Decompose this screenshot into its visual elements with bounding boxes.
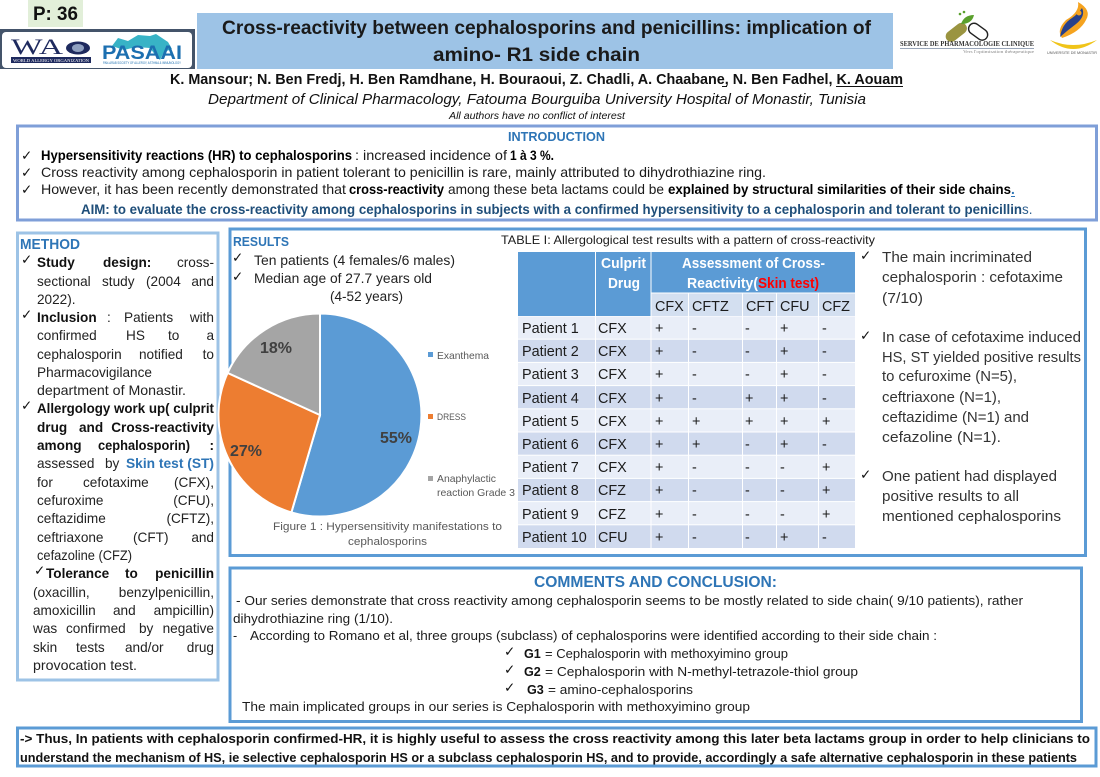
allergology work up: by: [105, 456, 120, 471]
study design: cross-: [177, 255, 214, 270]
table rows: Patient 1: [522, 321, 579, 337]
key findings list: positive results to all: [882, 489, 1019, 505]
logos: WAO and PASAAI: PASAAI: [102, 43, 182, 64]
inclusion: :: [107, 310, 111, 325]
conflict of interest note: All authors have no conflict of interest: [448, 111, 626, 122]
logo: university of Monastir: [1047, 2, 1097, 55]
logo: service de pharmacologie clinique: Vers l'optimisation thérapeutique: [963, 49, 1034, 54]
authors: K. Mansour; N. Ben Fredj, H. Ben Ramdhane, H. Bouraoui, Z. Chadli, A. Chaabane, N. Ben Fadhel, K. Aouam: [170, 72, 903, 88]
table rows: CFX: [598, 460, 627, 476]
table rows: -: [745, 530, 750, 546]
introduction bullet 3: However, it has been recently demonstrated that: [41, 182, 346, 197]
slice: exanthema 55%: [291, 314, 421, 517]
results summary: ✓: [232, 269, 243, 285]
panel: take-home conclusion: [18, 728, 1096, 766]
inclusion: [21, 307, 214, 398]
pie legend: [428, 351, 515, 499]
tolerance to penicillin: penicillin: [155, 566, 214, 581]
allergology work up: drug: [37, 420, 67, 435]
table rows: Patient 9: [522, 507, 579, 523]
table rows: -: [822, 321, 827, 337]
key findings list: ✓: [860, 248, 871, 264]
table rows: -: [692, 391, 697, 407]
tolerance to penicillin: to: [125, 566, 138, 581]
table rows: -: [692, 483, 697, 499]
table rows: +: [745, 391, 753, 407]
allergology work up: (CFT): [133, 530, 168, 545]
tolerance to penicillin: tests: [76, 640, 105, 655]
table rows: -: [745, 321, 750, 337]
introduction bullet 1: 1 à 3 %.: [510, 148, 554, 163]
cephalosporin groups list: ✓: [504, 680, 515, 696]
table rows: +: [780, 344, 788, 360]
inclusion: Patients: [124, 310, 173, 325]
allergology work up: cefazoline (CFZ): [37, 548, 132, 563]
study design: [21, 252, 214, 307]
key findings list: One patient had displayed: [882, 469, 1057, 485]
allergology work up: (CFU),: [173, 493, 214, 508]
key findings list: In case of cefotaxime induced: [882, 330, 1081, 346]
title banner: [197, 13, 893, 69]
table rows: -: [745, 367, 750, 383]
tolerance to penicillin: benzylpenicillin,: [119, 585, 214, 600]
table rows: -: [780, 483, 785, 499]
inclusion: a: [206, 328, 214, 343]
introduction bullet 3: among these beta lactams could be: [448, 182, 664, 197]
table rows: CFU: [598, 530, 628, 546]
table rows: -: [745, 437, 750, 453]
table rows: +: [780, 321, 788, 337]
panel: method: [18, 233, 218, 680]
inclusion: HS: [126, 328, 145, 343]
table header: [601, 256, 850, 315]
title banner: amino- R1 side chain: [433, 44, 640, 66]
allergology work up: (CFX),: [174, 475, 214, 490]
figure caption: [273, 521, 502, 548]
inclusion: ✓: [21, 307, 32, 323]
cephalosporin groups list: = Cephalosporin with N-methyl-tetrazole-thiol group: [545, 665, 858, 679]
key findings list: ceftazidime (N=1) and: [882, 410, 1029, 426]
key findings list: ✓: [860, 467, 871, 483]
inclusion: department of Monastir.: [37, 383, 186, 398]
key findings list: cefazoline (N=1).: [882, 430, 1001, 446]
table rows: CFX: [598, 367, 627, 383]
panel: comments and conclusion: [230, 568, 1082, 722]
comment 2: -: [233, 629, 237, 643]
allergology work up: ✓: [21, 398, 32, 414]
allergology work up: ceftazidime: [37, 511, 106, 526]
table rows: CFX: [598, 391, 627, 407]
table header: CFX: [655, 299, 684, 315]
results summary: ✓: [232, 250, 243, 266]
value label 55%: 55%: [380, 430, 412, 447]
comments heading: COMMENTS AND CONCLUSION:: [534, 574, 777, 591]
introduction bullet 2: Cross reactivity among cephalosporin in patient tolerant to penicillin is rare, mainly attributed to dihydrothiazine ring.: [41, 165, 766, 180]
table: allergological test results: [518, 252, 855, 548]
cephalosporin groups list: G3: [527, 683, 544, 697]
inclusion: to: [168, 328, 179, 343]
table rows: +: [655, 530, 663, 546]
table rows: +: [655, 414, 663, 430]
allergology work up: cephalosporin): [98, 438, 190, 453]
aim statement: s.: [1022, 202, 1032, 217]
introduction bullet 3: explained by structural similarities of their side chains: [668, 182, 1011, 197]
table rows: +: [822, 460, 830, 476]
table rows: Patient 2: [522, 344, 579, 360]
table rows: +: [822, 507, 830, 523]
allergology work up: Skin test (ST): [126, 456, 214, 471]
tolerance to penicillin: (oxacillin,: [33, 585, 90, 600]
table rows: -: [692, 321, 697, 337]
key findings list: [860, 248, 1081, 525]
results summary: Median age of 27.7 years old: [254, 271, 432, 286]
table header: Reactivity(: [687, 276, 758, 292]
slice: DRESS 27%: [218, 373, 320, 512]
cephalosporin groups list: = amino-cephalosporins: [548, 683, 693, 697]
table header: CFZ: [822, 299, 850, 315]
inclusion: cephalosporin: [37, 347, 122, 362]
table rows: -: [692, 367, 697, 383]
pie legend: DRESS: [437, 411, 466, 422]
tolerance to penicillin: ampicillin): [154, 603, 214, 618]
key findings list: ✓: [860, 328, 871, 344]
logos: WAO and PASAAI: WORLD ALLERGY ORGANIZATION: [13, 58, 90, 63]
table header: Culprit: [601, 256, 646, 272]
introduction bullet 1: ✓: [21, 148, 32, 164]
table rows: +: [822, 483, 830, 499]
introduction heading: INTRODUCTION: [508, 129, 605, 144]
comment 1: [233, 594, 1023, 626]
logos: WAO and PASAAI: [0, 29, 195, 69]
inclusion: Pharmacovigilance: [37, 365, 152, 380]
results summary: (4-52 years): [330, 289, 403, 304]
table rows: Patient 3: [522, 367, 579, 383]
table header: CFU: [780, 299, 810, 315]
study design: sectional: [37, 274, 91, 289]
tolerance to penicillin: by: [139, 621, 154, 636]
inclusion: Inclusion: [37, 310, 97, 325]
introduction bullet 3: .: [1011, 182, 1015, 197]
table rows: +: [655, 507, 663, 523]
slice: anaphylactic reaction 18%: [228, 313, 320, 415]
table rows: -: [692, 460, 697, 476]
table rows: +: [692, 414, 700, 430]
tolerance to penicillin: [32, 563, 214, 673]
figure caption: Figure 1 : Hypersensitivity manifestations to: [273, 521, 502, 533]
main implicated group statement: The main implicated groups in our series is Cephalosporin with methoxyimino group: [242, 700, 750, 714]
cephalosporin groups list: = Cephalosporin with methoxyimino group: [545, 647, 788, 661]
table rows: [522, 321, 830, 546]
comment 1: - Our series demonstrate that cross reactivity among cephalosporin seems to be mostly related to side chain( 9/10 patients), rather: [236, 594, 1023, 608]
tolerance to penicillin: skin: [33, 640, 57, 655]
table rows: +: [780, 530, 788, 546]
study design: 2022).: [37, 292, 76, 307]
logos: WAO and PASAAI: PAN-ARAB SOCIETY OF ALLERGY, ASTHMA & IMMUNOLOGY: [103, 61, 181, 65]
panel: introduction: [18, 126, 1096, 220]
table rows: +: [780, 437, 788, 453]
table rows: CFX: [598, 437, 627, 453]
introduction bullet 3: [21, 182, 1015, 198]
table header: CFT: [746, 299, 774, 315]
affiliation: Department of Clinical Pharmacology, Fatouma Bourguiba University Hospital of Monastir, Tunisia: [208, 92, 866, 108]
comment 2: According to Romano et al, three groups (subclass) of cephalosporins were identified according to their side chain :: [250, 629, 937, 643]
table rows: +: [655, 437, 663, 453]
panel: results: [218, 229, 1085, 556]
table rows: +: [655, 483, 663, 499]
table rows: Patient 4: [522, 391, 579, 407]
cephalosporin groups list: G1: [524, 647, 541, 661]
cephalosporin groups list: ✓: [504, 662, 515, 678]
key findings list: ceftriaxone (N=1),: [882, 390, 1001, 406]
study design: design:: [103, 255, 151, 270]
allergology work up: and: [79, 420, 103, 435]
poster number badge: [28, 0, 83, 27]
value label 27%: 27%: [230, 443, 262, 460]
panel: take-home conclusion: understand the mechanism of HS, ie selective cephalosporin HS or a subclass cephalosporin HS, and to provide, accordingly a safe alternative cephalosporin in these patients: [20, 750, 1077, 765]
logo: service de pharmacologie clinique: SERVICE DE PHARMACOLOGIE CLINIQUE: [900, 39, 1034, 48]
table rows: Patient 6: [522, 437, 579, 453]
table rows: -: [745, 460, 750, 476]
logos: WAO and PASAAI: WA: [11, 34, 63, 59]
inclusion: notified: [139, 347, 183, 362]
tolerance to penicillin: drug: [187, 640, 214, 655]
tolerance to penicillin: and: [113, 603, 136, 618]
results summary: [232, 250, 455, 304]
allergology work up: :: [209, 438, 214, 453]
key findings list: The main incriminated: [882, 250, 1032, 266]
table rows: Patient 10: [522, 530, 587, 546]
allergology work up: assessed: [37, 456, 94, 471]
table header: Skin test): [758, 276, 819, 292]
allergology work up: cefuroxime: [37, 493, 103, 508]
study design: and: [191, 274, 214, 289]
allergology work up: for: [37, 475, 53, 490]
table header: Drug: [608, 276, 640, 292]
table rows: CFX: [598, 344, 627, 360]
table rows: -: [822, 367, 827, 383]
table rows: CFZ: [598, 507, 626, 523]
allergology work up: Cross-reactivity: [111, 420, 214, 435]
introduction bullet 1: Hypersensitivity reactions (HR) to cephalosporins: [41, 148, 352, 163]
pie legend: Anaphylactic: [437, 474, 496, 485]
panel: take-home conclusion: -> Thus, In patients with cephalosporin confirmed-HR, it is highly useful to assess the cross reactivity among this later beta lactams group in order to help clinicians to: [20, 731, 1090, 746]
table rows: CFZ: [598, 483, 626, 499]
table rows: +: [655, 344, 663, 360]
inclusion: confirmed: [37, 328, 97, 343]
table rows: -: [692, 344, 697, 360]
introduction bullet 1: : increased incidence of: [355, 148, 507, 163]
table rows: Patient 5: [522, 414, 579, 430]
pie legend: reaction Grade 3: [437, 488, 515, 499]
pie legend: Exanthema: [437, 351, 489, 362]
introduction bullet 2: ✓: [21, 165, 32, 181]
inclusion: to: [203, 347, 214, 362]
study design: (2004: [146, 274, 181, 289]
table rows: -: [745, 344, 750, 360]
allergology work up: cefotaxime: [83, 475, 149, 490]
table header: Assessment of Cross-: [682, 256, 825, 272]
poster number badge: P: 36: [33, 4, 78, 25]
allergology work up: ceftriaxone: [37, 530, 104, 545]
table rows: +: [692, 437, 700, 453]
table header: CFTZ: [692, 299, 729, 315]
tolerance to penicillin: Tolerance: [46, 566, 110, 581]
figure caption: cephalosporins: [348, 536, 427, 548]
key findings list: HS, ST yielded positive results: [882, 350, 1081, 366]
study design: study: [102, 274, 135, 289]
introduction bullet 1: [21, 148, 554, 164]
comment 1: dihydrothiazine ring (1/10).: [233, 612, 393, 626]
table rows: +: [655, 321, 663, 337]
allergology work up: [21, 398, 214, 563]
table rows: -: [780, 460, 785, 476]
table rows: -: [780, 507, 785, 523]
aim statement: AIM: to evaluate the cross-reactivity among cephalosporins in subjects with a confirmed hypersensitivity to a cephalosporin and tolerant to penicillin: [81, 202, 1022, 217]
table rows: -: [745, 483, 750, 499]
study design: ✓: [21, 252, 32, 268]
allergology work up: (CFTZ),: [166, 511, 214, 526]
table rows: Patient 8: [522, 483, 579, 499]
title banner: Cross-reactivity between cephalosporins and penicillins: implication of: [222, 17, 871, 39]
table rows: CFX: [598, 321, 627, 337]
cephalosporin groups list: ✓: [504, 644, 515, 660]
cephalosporin groups list: [504, 644, 858, 697]
tolerance to penicillin: negative: [163, 621, 214, 636]
cephalosporin groups list: G2: [524, 665, 541, 679]
table rows: -: [822, 391, 827, 407]
table rows: +: [655, 367, 663, 383]
logo: service de pharmacologie clinique: [900, 11, 1034, 54]
allergology work up: and: [191, 530, 214, 545]
table title: TABLE I: Allergological test results with a pattern of cross-reactivity: [501, 233, 875, 247]
pie chart: hypersensitivity manifestations: [218, 313, 421, 517]
tolerance to penicillin: was: [32, 621, 57, 636]
table rows: +: [780, 367, 788, 383]
tolerance to penicillin: and/or: [125, 640, 164, 655]
key findings list: cephalosporin : cefotaxime: [882, 270, 1063, 286]
table rows: -: [745, 507, 750, 523]
tolerance to penicillin: ✓: [34, 563, 45, 579]
table rows: +: [655, 460, 663, 476]
table rows: -: [692, 530, 697, 546]
results summary: Ten patients (4 females/6 males): [254, 253, 455, 268]
allergology work up: among: [37, 438, 82, 453]
key findings list: mentioned cephalosporins: [882, 509, 1061, 525]
introduction bullet 3: cross-reactivity: [349, 182, 444, 197]
table rows: Patient 7: [522, 460, 579, 476]
inclusion: with: [189, 310, 214, 325]
key findings list: to cefuroxime (N=5),: [882, 369, 1017, 385]
table rows: -: [822, 437, 827, 453]
value label 18%: 18%: [260, 340, 292, 357]
study design: Study: [37, 255, 75, 270]
table rows: +: [780, 391, 788, 407]
table rows: +: [822, 414, 830, 430]
introduction bullet 3: ✓: [21, 182, 32, 198]
tolerance to penicillin: confirmed: [66, 621, 126, 636]
key findings list: (7/10): [882, 291, 923, 307]
table rows: -: [822, 530, 827, 546]
tolerance to penicillin: amoxicillin: [33, 603, 96, 618]
table rows: -: [692, 507, 697, 523]
method heading: METHOD: [20, 237, 80, 253]
table rows: CFX: [598, 414, 627, 430]
allergology work up: Allergology work up( culprit: [37, 401, 214, 416]
logo: university of Monastir: UNIVERSITE DE MONASTIR: [1047, 50, 1097, 55]
table rows: +: [655, 391, 663, 407]
tolerance to penicillin: provocation test.: [33, 658, 137, 673]
table rows: +: [780, 414, 788, 430]
table rows: -: [822, 344, 827, 360]
table rows: +: [745, 414, 753, 430]
results heading: RESULTS: [233, 234, 289, 249]
